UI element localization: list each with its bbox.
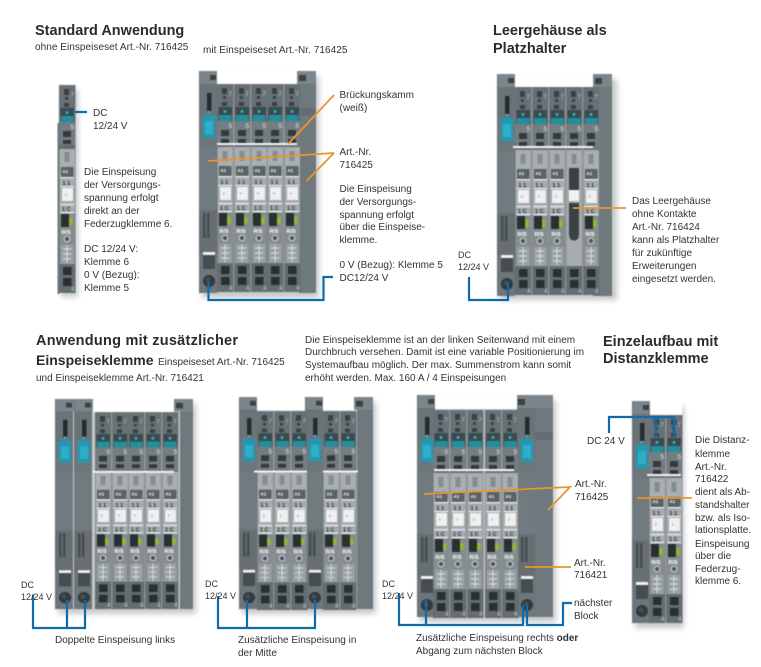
text: Klemmen: 0 V (Bezug): [84, 270, 140, 281]
text: Einspeisung direkt: direkt an der [84, 206, 140, 217]
label: Art.-Nr. 716425: 716425 [575, 492, 609, 503]
orange leader line [573, 207, 626, 209]
label: DC 24 V: DC 24 V [587, 436, 625, 447]
text: Einspeisung über Einspeiseklemme: über die Einspeise- [340, 222, 425, 233]
text: Leergehäuse description: ohne Kontakte [632, 209, 697, 220]
text: Distanzklemme description: lationsplatte. [695, 525, 751, 536]
text: Leergehäuse description: für zukünftige [632, 248, 692, 259]
text: Leergehäuse description: kann als Platzhalter [632, 235, 720, 246]
label: Brückungskamm: Brückungskamm [340, 90, 414, 101]
caption: Zusätzliche Einspeisung Mitte: der Mitte [238, 648, 277, 659]
label: DC 12/24 V: DC [205, 579, 218, 589]
text: Distanzklemme description: klemme [695, 449, 730, 460]
text: Klemmen: Klemme 6 [84, 257, 129, 268]
text: Einspeiseklemme description: Systemaufbau möglich. Der max. Summenstrom kann somit [305, 360, 571, 371]
blue feed line [469, 277, 508, 300]
text: Distanzklemme description: klemme 6. [695, 576, 741, 587]
label: Brückungskamm: (weiß) [340, 103, 367, 114]
label: Art.-Nr. 716425: Art.-Nr. [340, 147, 371, 158]
orange leader lines [208, 95, 334, 181]
text: Einspeisung direkt: der Versorgungs- [84, 180, 161, 191]
text: Leergehäuse description: Erweiterungen [632, 261, 696, 272]
heading: Leergehäuse als Platzhalter: Platzhalter [493, 41, 567, 57]
label: Art.-Nr. 716421: Art.-Nr. [574, 558, 606, 569]
label: DC 12/24 V: DC [93, 108, 107, 119]
blue feed lines [218, 596, 315, 628]
text: Einspeisung über Einspeiseklemme: Die Einspeisung [340, 184, 412, 195]
text: Bezug Klemme 5: 0 V (Bezug): Klemme 5 [340, 260, 443, 271]
text: Distanzklemme description: dient als Ab- [695, 487, 750, 498]
orange leader line [637, 497, 692, 499]
heading: Einzelaufbau mit Distanzklemme: Distanzklemme [603, 351, 709, 367]
blue feed lines [33, 595, 85, 628]
label: DC 12/24 V: 12/24 V [21, 592, 52, 602]
relay block with feed set [199, 71, 319, 298]
relay block: additional feed in middle [239, 397, 376, 614]
heading: Standard Anwendung: Standard Anwendung [35, 23, 184, 39]
blue feed lines [609, 417, 674, 437]
label: DC 12/24 V: DC [21, 580, 34, 590]
subheading: Einspeiseklemme: und Einspeiseklemme Art.-Nr. 716421 [36, 373, 204, 384]
text: Distanzklemme description: Federzug- [695, 564, 741, 575]
single relay module [58, 85, 78, 297]
text: Distanzklemme description: Die Distanz- [695, 435, 749, 446]
label: nächster Block: nächster [574, 598, 612, 609]
text: Distanzklemme description: 716422 [695, 474, 729, 485]
text: Einspeiseklemme description: Die Einspeiseklemme ist an der linken Seitenwand mit einem [305, 335, 575, 346]
text: Bezug Klemme 5: DC12/24 V [340, 273, 389, 284]
text: Einspeisung direkt: Die Einspeisung [84, 167, 156, 178]
text: Distanzklemme description: über die [695, 551, 732, 562]
orange leader lines [424, 487, 571, 567]
text: Einspeiseklemme description: erhöht werden. Max. 160 A / 4 Einspeisungen [305, 373, 506, 384]
relay block with empty housing [497, 74, 617, 300]
label: DC 12/24 V: 12/24 V [93, 121, 128, 132]
label: Art.-Nr. 716425: Art.-Nr. [575, 479, 607, 490]
text: Einspeisung über Einspeiseklemme: der Versorgungs- [340, 197, 416, 208]
blue feed line [208, 277, 333, 300]
text: Distanzklemme description: Art.-Nr. [695, 462, 727, 473]
caption: Doppelte Einspeisung: Doppelte Einspeisung links [55, 635, 175, 646]
label: DC 12/24 V: DC [382, 579, 395, 589]
text: Leergehäuse description: eingesetzt werden. [632, 274, 716, 285]
heading: Anwendung mit zusätzlicher Einspeiseklemme: Anwendung mit zusätzlicher [36, 333, 238, 349]
text: Einspeisung direkt: Federzugklemme 6. [84, 219, 172, 230]
text: Einspeisung direkt: spannung erfolgt [84, 193, 159, 204]
text: Distanzklemme description: Einspeisung [695, 539, 749, 550]
relay block with spacer terminal [632, 401, 684, 628]
text: Einspeisung über Einspeiseklemme: spannung erfolgt [340, 210, 414, 221]
subheading: Einspeiseset: Einspeiseset Art.-Nr. 716425 [158, 357, 285, 368]
label: nächster Block: Block [574, 611, 599, 622]
text: Einspeisung über Einspeiseklemme: klemme. [340, 235, 377, 246]
label: Art.-Nr. 716421: 716421 [574, 570, 608, 581]
label: DC 12/24 V: 12/24 V [382, 591, 413, 601]
subheading: ohne Einspeiseset: ohne Einspeiseset Art.-Nr. 716425 [35, 42, 189, 53]
text: Distanzklemme description: bzw. als Iso- [695, 513, 750, 524]
label: Art.-Nr. 716425: 716425 [340, 160, 373, 171]
relay block: additional feed right [417, 395, 556, 622]
text: Klemmen: Klemme 5 [84, 283, 129, 294]
text: Distanzklemme description: standshalter [695, 500, 750, 511]
text: Leergehäuse description: Art.-Nr. 716424 [632, 222, 700, 233]
blue feed lines [399, 593, 572, 625]
caption: Zusätzliche Einspeisung rechts: Zusätzliche Einspeisung rechts oder [416, 633, 578, 644]
text: Leergehäuse description: Das Leergehäuse [632, 196, 711, 207]
caption: Zusätzliche Einspeisung rechts: Abgang zum nächsten Block [416, 646, 544, 657]
text: Klemmen: DC 12/24 V: [84, 244, 138, 255]
text: Einspeiseklemme description: Durchbruch versehen. Damit ist eine variable Positionierung im [305, 347, 584, 358]
subheading: mit Einspeiseset: mit Einspeiseset Art.-Nr. 716425 [203, 45, 348, 56]
heading: Leergehäuse als Platzhalter: Leergehäuse als [493, 23, 607, 39]
heading: Anwendung mit zusätzlicher Einspeiseklemme: Einspeiseklemme [36, 352, 154, 368]
label: DC 12/24 V: 12/24 V [458, 262, 489, 272]
relay block: double feed left [55, 399, 196, 614]
label: DC 12/24 V: DC [458, 250, 471, 260]
heading: Einzelaufbau mit Distanzklemme: Einzelaufbau mit [603, 334, 718, 350]
DC connection line [75, 111, 87, 113]
label: DC 12/24 V: 12/24 V [205, 591, 236, 601]
caption: Zusätzliche Einspeisung Mitte: Zusätzliche Einspeisung in [238, 635, 356, 646]
